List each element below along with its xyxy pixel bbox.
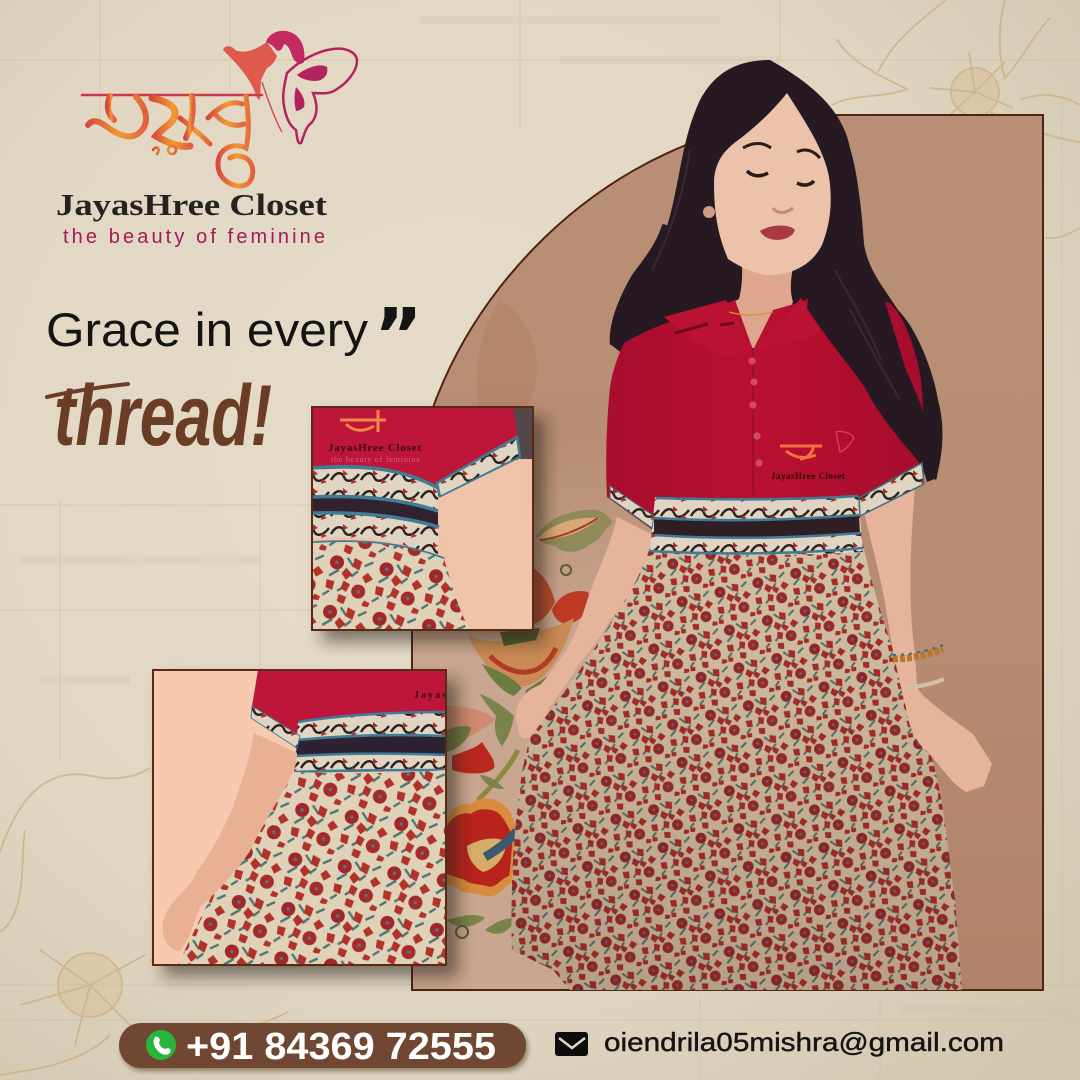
lower-left tint with painted florals	[413, 440, 660, 989]
logo	[56, 31, 357, 248]
waist border bands	[650, 495, 863, 555]
bracelets	[893, 645, 944, 687]
icon: painted red flower middle	[447, 706, 518, 800]
left arm	[516, 517, 653, 738]
email contact: oiendrila05mishra@gmail.com	[604, 1027, 1004, 1057]
inset: sleeve detail	[312, 407, 533, 630]
skirt with floral print	[511, 544, 962, 990]
inset: skirt detail	[153, 670, 446, 965]
hair, front strands	[610, 150, 937, 482]
heading	[46, 293, 423, 464]
icon: painted red flower upper	[533, 565, 589, 624]
shirt logo: JayasHree Closet	[771, 471, 845, 481]
shirt collar and placket	[664, 298, 821, 495]
script word: thread!	[54, 368, 272, 464]
panel: arched brown backdrop	[412, 115, 1043, 990]
inset: skirt detail: Jayas	[414, 690, 446, 701]
hair, back layer	[610, 60, 942, 480]
decorative flower outline: top right	[832, 0, 1080, 238]
person wearing kurti	[511, 60, 992, 990]
decorative flower outline: bottom left	[0, 768, 310, 1075]
right arm	[863, 488, 992, 792]
decorative logo flourish	[82, 94, 262, 186]
brand name: JayasHree Closet	[56, 187, 328, 222]
heading: Grace in every	[46, 303, 369, 356]
sleeve borders	[610, 486, 654, 528]
icon: painted fan flower	[468, 618, 574, 746]
icon: butterfly fairy	[223, 31, 357, 143]
brand tagline: the beauty of feminine	[63, 226, 325, 248]
icon: quotation mark: ”	[374, 293, 423, 379]
icon: phone	[146, 1030, 176, 1060]
icon: painted leaf	[536, 510, 612, 552]
red shirt	[606, 296, 924, 531]
neck	[731, 250, 795, 349]
phone pill: +91 84369 72555	[186, 1026, 496, 1068]
inset: sleeve detail: JayasHree Closet	[328, 442, 421, 454]
phone pill	[119, 1023, 526, 1068]
face	[714, 93, 831, 275]
shirt logo	[771, 431, 854, 481]
inset: sleeve detail: the beauty of feminine	[331, 455, 420, 464]
face features	[703, 144, 820, 240]
icon: painted large red flower	[447, 798, 517, 938]
icon: envelope	[555, 1032, 588, 1056]
